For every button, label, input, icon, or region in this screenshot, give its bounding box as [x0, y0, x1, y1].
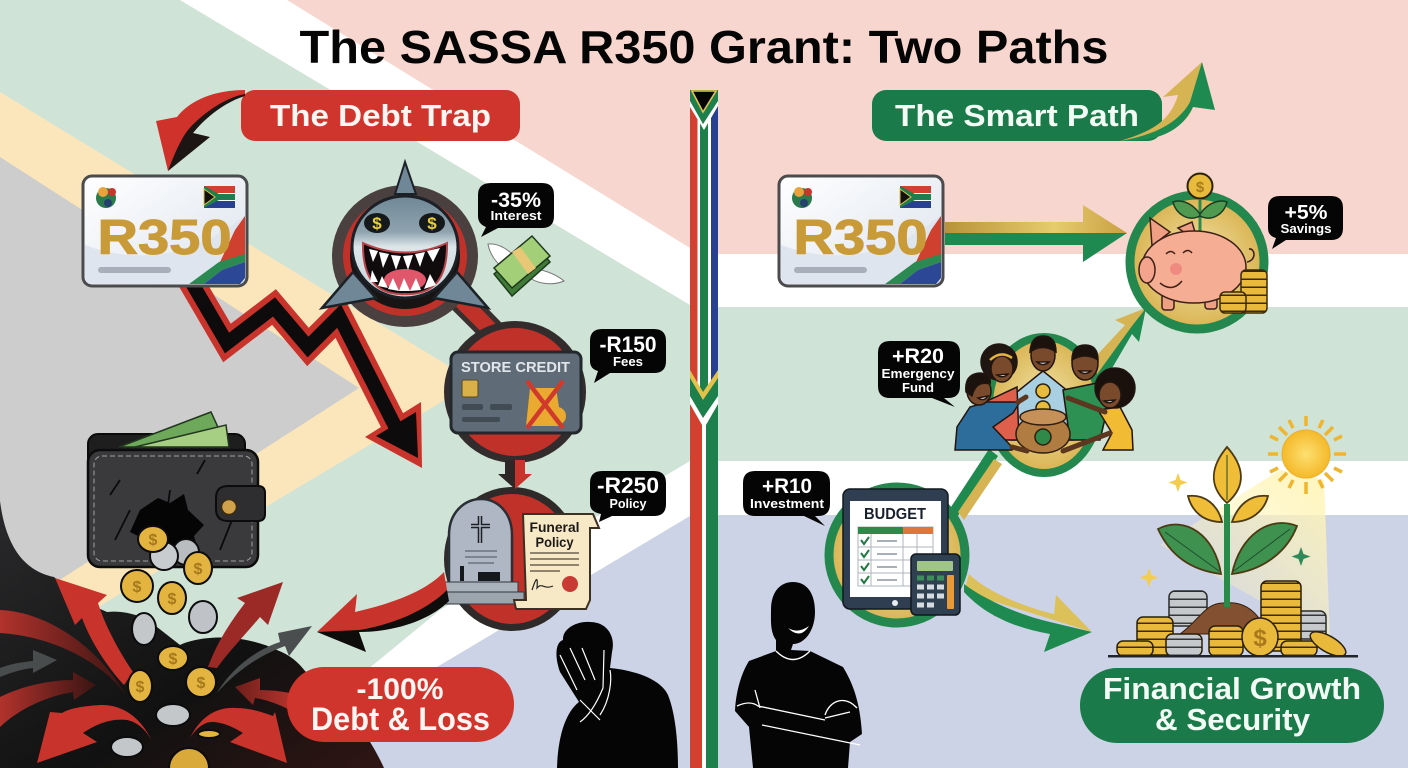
funeral policy scroll: Funeral	[530, 519, 580, 535]
icon: budget tablet and calculator	[829, 487, 965, 623]
pig	[1139, 218, 1254, 310]
arrow: budget to growth	[964, 574, 1092, 652]
icon: broken wallet	[88, 412, 265, 567]
callout: +5% savings: Savings	[1280, 221, 1332, 236]
connector: shark to store credit	[452, 292, 510, 346]
badge: the debt trap	[241, 90, 520, 141]
callout: -R150 fees: -R150	[600, 332, 656, 357]
budget table	[858, 527, 933, 586]
icon: budget tablet and calculator: BUDGET	[864, 506, 926, 523]
plant stem	[1224, 504, 1230, 607]
icon: loan shark	[322, 162, 488, 327]
coin dollar marks: $	[136, 679, 145, 696]
person: left woman	[981, 344, 1019, 440]
icon: store credit card	[444, 321, 586, 463]
callout: +5% savings: +5%	[1284, 202, 1328, 224]
callout: -R150 fees: Fees	[613, 354, 643, 369]
amount: R350	[794, 211, 928, 265]
shark mouth	[363, 243, 447, 294]
arrow: card to savings	[945, 205, 1127, 262]
person: left boy	[955, 373, 1020, 450]
coin stacks	[1220, 270, 1267, 313]
coin stacks front	[1117, 581, 1349, 661]
callout: -35% interest: Interest	[490, 208, 542, 223]
arrow: emergency fund to savings	[1085, 308, 1146, 382]
person: right man	[1063, 345, 1107, 440]
arrow: funeral policy to loss	[317, 572, 449, 652]
icon: coat of arms	[792, 187, 812, 208]
callout: +R20 emergency fund: +R20	[892, 345, 944, 368]
wallet clasp	[216, 486, 265, 521]
badge: the debt trap: The Debt Trap	[270, 98, 491, 133]
arms and hands	[1012, 397, 1110, 451]
sprout and coin: $	[1196, 179, 1205, 196]
icon: funeral policy	[436, 487, 599, 631]
background: right flag bands	[704, 0, 1408, 768]
icon: flag	[900, 186, 931, 208]
callout: -35% interest: -35%	[491, 189, 541, 212]
central flag divider	[690, 90, 718, 768]
leaves	[1158, 447, 1297, 574]
shark eyes: $	[372, 214, 382, 233]
pill: financial growth and security	[1080, 668, 1384, 743]
callout: +R20 emergency fund	[878, 341, 960, 407]
arrow: store credit to funeral policy	[498, 460, 532, 489]
person: centre man	[1012, 336, 1074, 440]
pill: financial growth and security: & Security	[1155, 702, 1311, 737]
callout: -R250 policy: Policy	[610, 496, 647, 511]
card: R350 right	[779, 176, 943, 286]
callout: -35% interest	[478, 183, 554, 237]
callout: -R150 fees	[590, 329, 666, 383]
callout: +5% savings	[1268, 196, 1343, 249]
shark eyes	[364, 213, 445, 233]
callout: +R20 emergency fund: Fund	[902, 380, 934, 395]
callout: +R10 investment: +R10	[762, 475, 812, 498]
callout: -R250 policy: -R250	[597, 473, 659, 498]
callout: -R250 policy	[590, 471, 666, 522]
icon: money with wings	[488, 236, 564, 296]
icon: crossed shopping bag	[526, 381, 566, 428]
coin dollar marks	[133, 532, 206, 696]
arrow: debt trap to card	[156, 90, 245, 171]
funeral policy scroll	[514, 514, 599, 609]
coins dropping	[1036, 384, 1050, 415]
icon: growing plant on coins: $	[1253, 625, 1267, 652]
arrow: zigzag decline	[189, 278, 422, 468]
coin dollar marks: $	[197, 675, 206, 692]
coin dollar marks: $	[194, 561, 203, 578]
coin dollar marks: $	[133, 579, 142, 596]
coin dollar marks: $	[169, 651, 178, 668]
funeral policy scroll: Policy	[536, 534, 574, 550]
icon: family emergency fund	[955, 336, 1135, 473]
coin dollar marks: $	[168, 591, 177, 608]
icon: store credit card: STORE CREDIT	[461, 360, 570, 376]
silhouette: distressed person	[556, 622, 678, 768]
sparkles	[1140, 473, 1310, 587]
callout: +R10 investment: Investment	[750, 496, 825, 511]
pill: -100% debt and loss: Debt & Loss	[311, 701, 490, 737]
callout: +R20 emergency fund: Emergency	[882, 366, 955, 381]
coin dollar marks: $	[149, 532, 158, 549]
calculator	[911, 554, 960, 615]
badge: the smart path	[872, 90, 1162, 141]
coin stacks back	[1169, 591, 1326, 639]
icon: flag	[204, 186, 235, 208]
loss arrows	[0, 578, 312, 763]
icon: growing plant on coins	[1108, 447, 1358, 661]
icon: coat of arms	[96, 187, 116, 208]
badge: the smart path: The Smart Path	[895, 98, 1139, 133]
silhouette: confident person	[735, 582, 862, 768]
pill: -100% debt and loss: -100%	[356, 673, 444, 706]
background: left flag pattern	[0, 0, 704, 768]
arrow: smart path upward	[1120, 62, 1215, 141]
icon: sun with beam	[1160, 416, 1346, 640]
person: right woman	[1095, 368, 1135, 450]
pill: financial growth and security: Financial Growth	[1103, 671, 1361, 706]
arrow: budget to emergency fund	[951, 449, 1002, 520]
icon: piggy bank savings	[1130, 174, 1267, 329]
soil mound	[1180, 603, 1268, 634]
amount: R350	[98, 211, 232, 265]
callout: +R10 investment	[743, 471, 830, 526]
card: R350 left	[83, 176, 247, 286]
icon: black debt hole	[0, 501, 384, 768]
title: The SASSA R350 Grant: Two Paths	[300, 21, 1108, 73]
shark eyes: $	[427, 214, 437, 233]
pill: -100% debt and loss	[287, 667, 514, 742]
falling coins	[111, 526, 220, 768]
money pot	[1016, 409, 1070, 453]
sprout and coin	[1173, 174, 1227, 235]
